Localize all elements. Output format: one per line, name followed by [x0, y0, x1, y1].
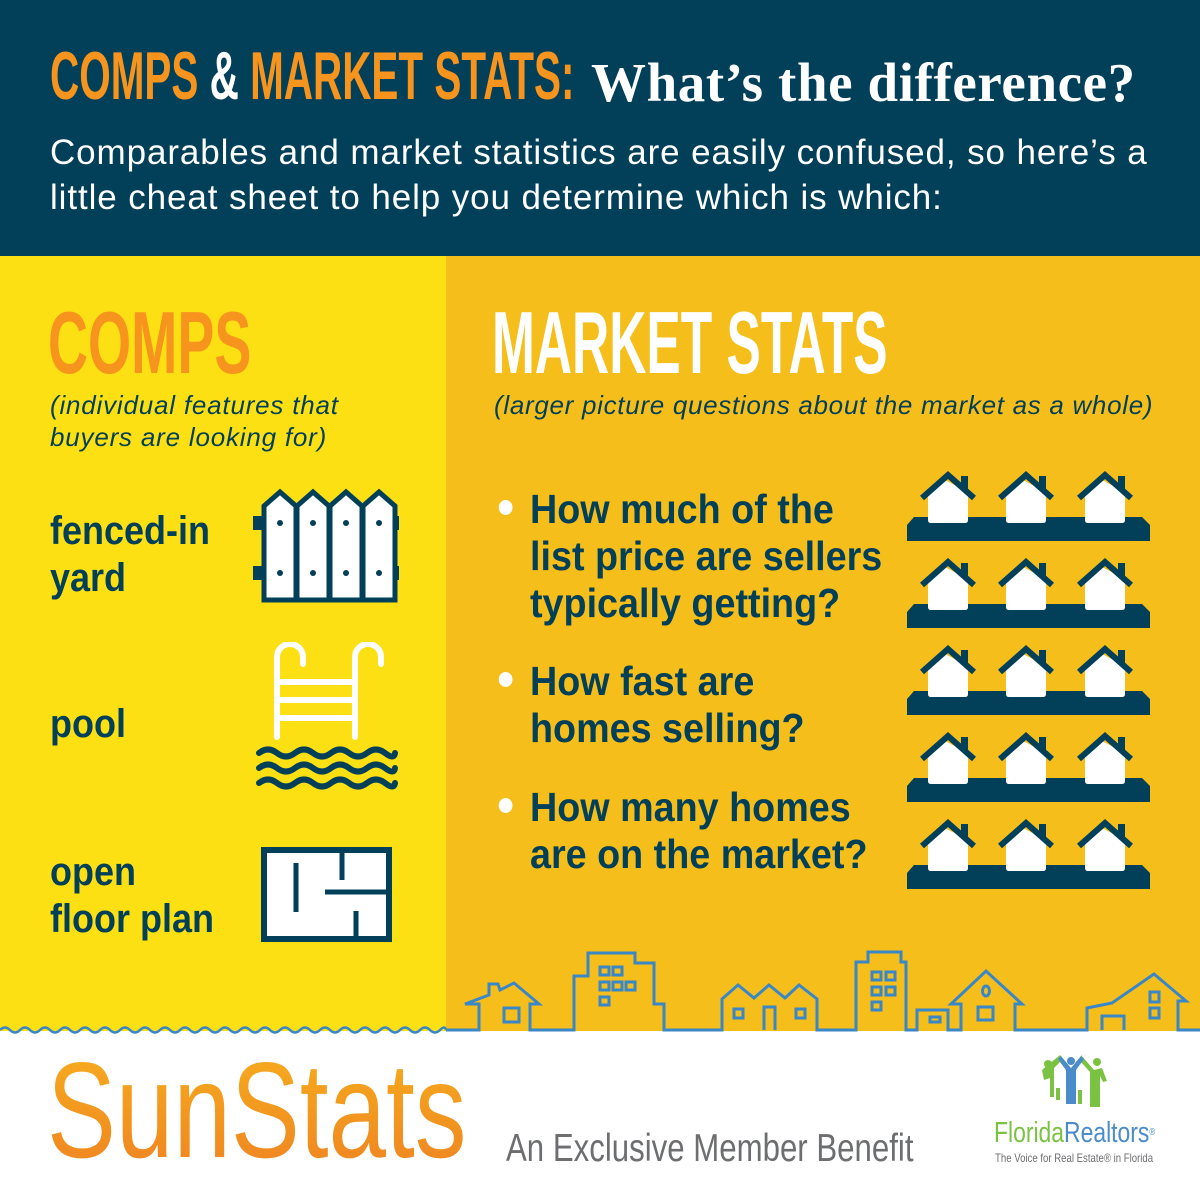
question 2: homes selling?	[530, 705, 805, 751]
question 2: How fast are	[530, 658, 754, 704]
Florida Realtors wordmark: FloridaRealtors®	[994, 1117, 1155, 1149]
market stats subheading: (larger picture questions about the market as a whole)	[494, 390, 1153, 420]
comps subheading	[50, 390, 339, 452]
skyline illustration	[0, 950, 1200, 1034]
icon: pool	[256, 642, 398, 790]
feature: fenced-in yard	[50, 509, 210, 600]
question 3	[498, 784, 867, 877]
question 2	[498, 658, 805, 751]
icon: floor plan	[261, 847, 392, 942]
Florida Realtors logo	[994, 1055, 1156, 1165]
header band	[0, 0, 1200, 256]
question 3: How many homes	[530, 784, 851, 830]
footer tagline: An Exclusive Member Benefit	[506, 1127, 914, 1170]
icon: fence	[253, 488, 399, 602]
comps subheading: (individual features that	[50, 390, 339, 420]
feature: fenced-in yard: fenced-in	[50, 509, 210, 553]
market stats heading: MARKET STATS	[492, 293, 888, 392]
Florida Realtors slogan: The Voice for Real Estate® in Florida	[995, 1151, 1153, 1165]
title: What’s the difference?	[591, 52, 1136, 113]
feature: pool: pool	[50, 702, 126, 746]
footer: SunStats logo: SunStats®	[47, 1034, 483, 1186]
feature: open floor plan: floor plan	[50, 897, 214, 941]
question 3: are on the market?	[530, 831, 867, 877]
feature: open floor plan: open	[50, 850, 136, 894]
feature: open floor plan	[50, 850, 214, 941]
title	[50, 38, 1136, 114]
question 1: list price are sellers	[530, 533, 882, 579]
question 1: typically getting?	[530, 580, 840, 626]
comps subheading: buyers are looking for)	[50, 422, 327, 452]
subtitle: Comparables and market statistics are easily confused, so here’s a little cheat sheet to help you determine which is which:	[50, 133, 1148, 217]
icon: houses on shelves	[907, 471, 1150, 889]
comps heading: COMPS	[48, 293, 251, 392]
panel: comps	[0, 256, 446, 1031]
question 1	[498, 486, 882, 626]
feature: fenced-in yard: yard	[50, 556, 126, 600]
icon: realtors people houses	[1042, 1055, 1107, 1107]
title: COMPS & MARKET STATS:	[50, 38, 574, 114]
panel: market stats	[446, 256, 1200, 1031]
question 1: How much of the	[530, 486, 834, 532]
